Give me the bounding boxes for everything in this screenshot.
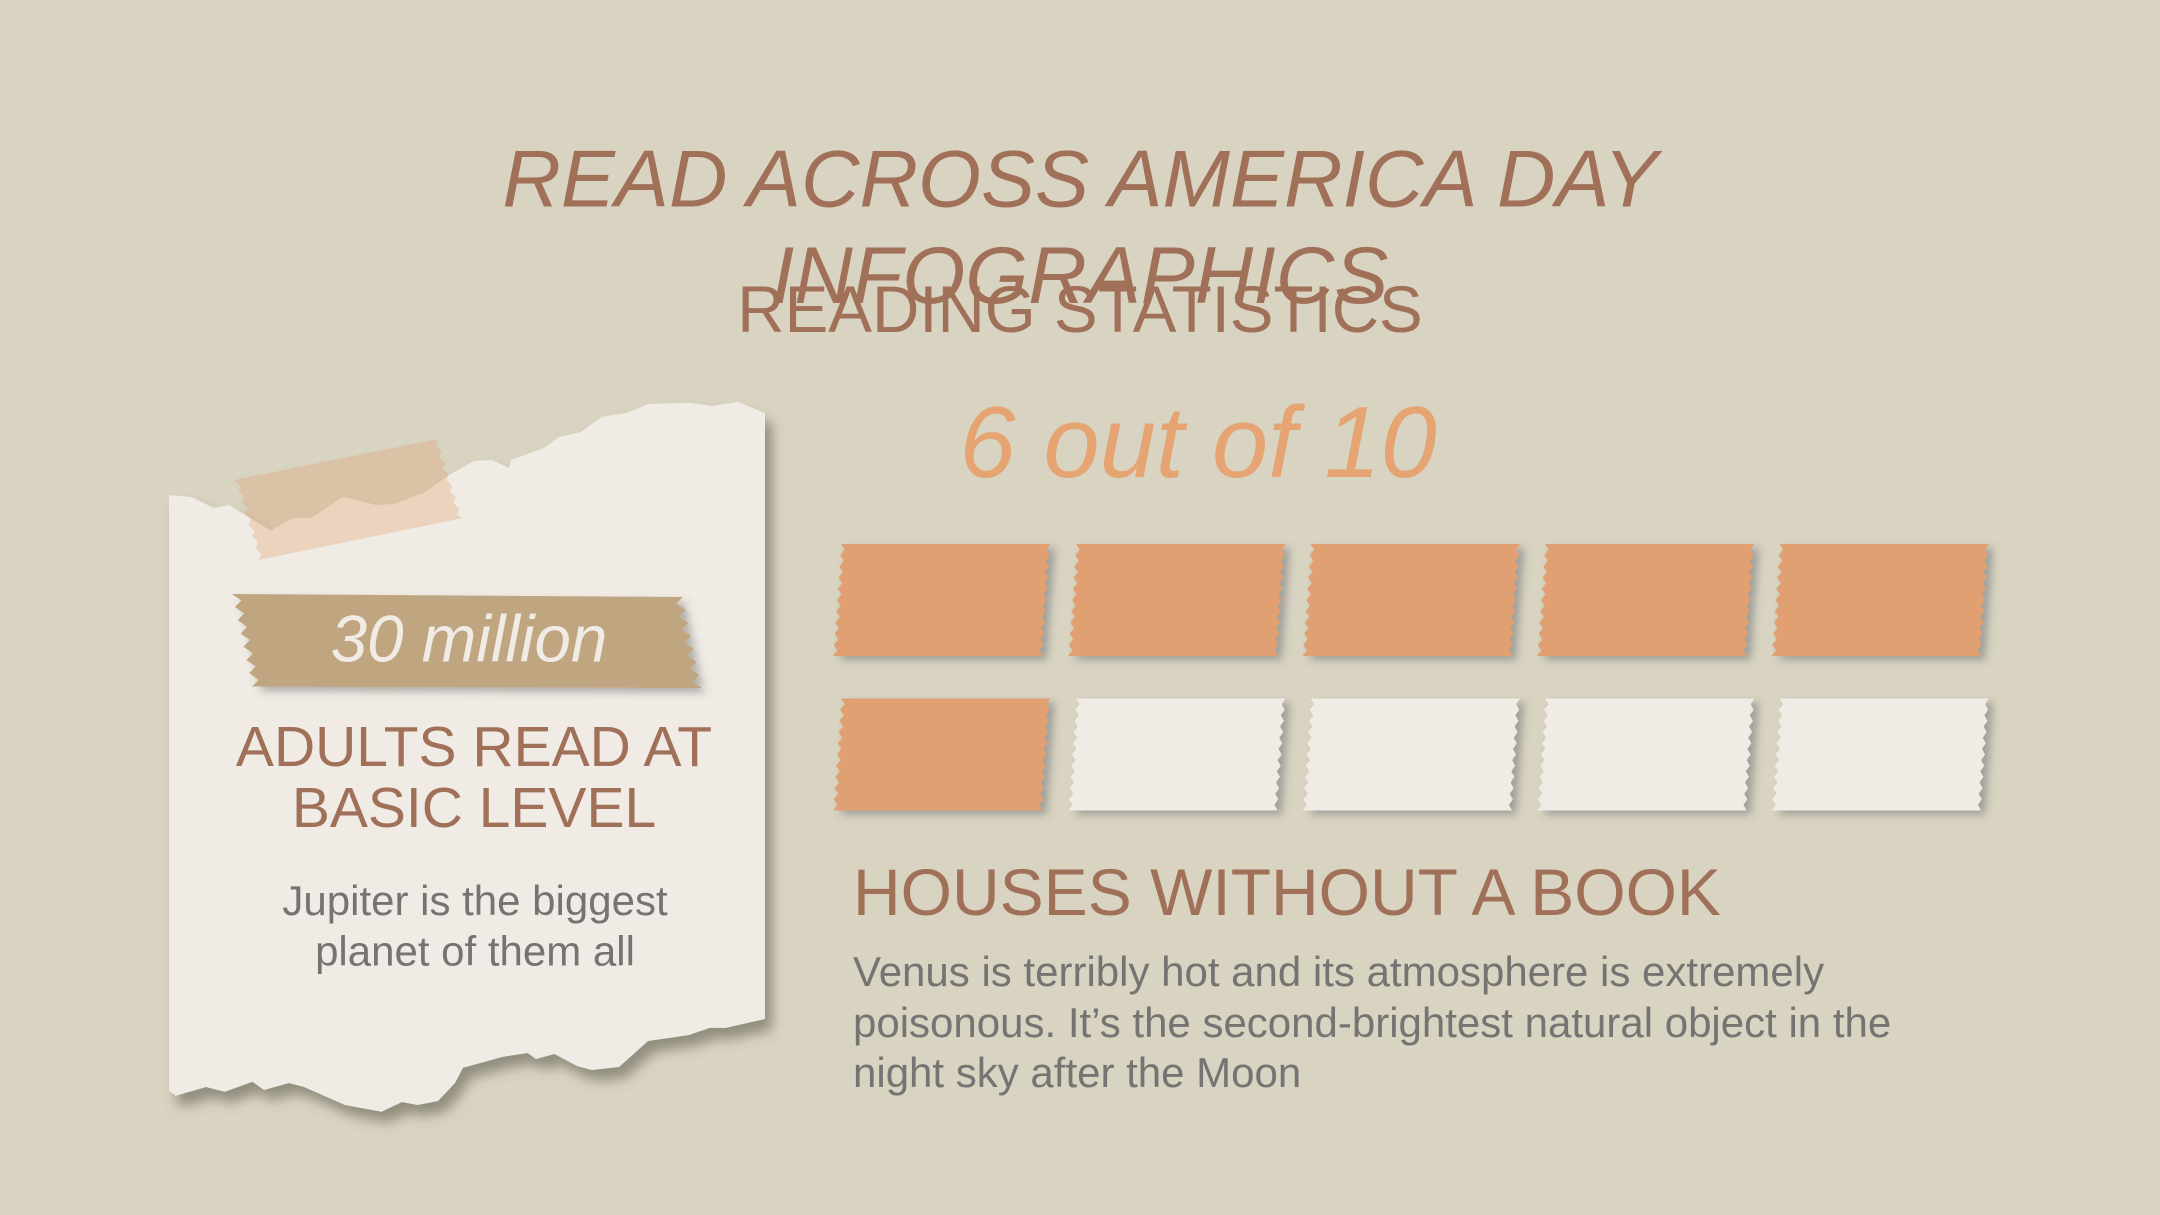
filled ticket 5 bbox=[1772, 544, 1989, 656]
filled ticket 1 bbox=[833, 544, 1050, 656]
heading: houses without a book: HOUSES WITHOUT A BOOK bbox=[853, 855, 1721, 929]
text block: Venus: night sky after the Moon bbox=[853, 1049, 1301, 1096]
empty ticket 7 bbox=[1068, 698, 1286, 810]
icon: pink washi tape bbox=[234, 439, 463, 560]
empty ticket 9 bbox=[1537, 698, 1754, 810]
stat ribbon: 30 million: 30 million bbox=[331, 602, 607, 676]
title: READ ACROSS AMERICA DAY bbox=[502, 134, 1658, 224]
text block: Jupiter: Jupiter is the biggest bbox=[282, 877, 668, 924]
chart: ticket pictogram, 6 of 10 filled bbox=[833, 544, 1989, 810]
text block: Jupiter: planet of them all bbox=[315, 928, 635, 974]
filled ticket 4 bbox=[1537, 544, 1754, 656]
filled ticket 2 bbox=[1068, 544, 1286, 656]
empty ticket 8 bbox=[1302, 698, 1520, 810]
title: INFOGRAPHICS bbox=[772, 231, 1388, 321]
subtitle: READING STATISTICS bbox=[737, 273, 1423, 346]
heading: adults read at basic level: BASIC LEVEL bbox=[292, 776, 656, 840]
heading: adults read at basic level: ADULTS READ AT bbox=[236, 715, 712, 779]
text block: Venus: poisonous. It’s the second-brightest natural object in the bbox=[853, 999, 1891, 1046]
torn paper sheet bbox=[169, 402, 765, 1112]
filled ticket 3 bbox=[1302, 544, 1520, 656]
statistic: 6 out of 10: 6 out of 10 bbox=[959, 387, 1437, 499]
panel: torn paper note bbox=[169, 402, 765, 1112]
text block: Venus: Venus is terribly hot and its atmosphere is extremely bbox=[853, 948, 1824, 995]
stat ribbon: 30 million bbox=[232, 594, 702, 688]
filled ticket 6 bbox=[833, 698, 1050, 810]
empty ticket 10 bbox=[1772, 698, 1989, 810]
